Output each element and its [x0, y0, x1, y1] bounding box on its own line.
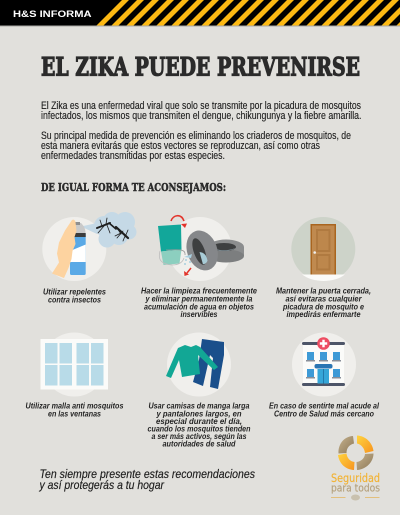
icon: upper arrow — [171, 216, 187, 228]
item: long clothing — [148, 332, 250, 448]
header label: H&S INFORMA — [13, 9, 92, 20]
closing message: Ten siempre presente estas recomendaciones — [40, 468, 255, 481]
intro paragraph 1 — [41, 100, 362, 122]
caption: en las ventanas — [48, 410, 101, 418]
icon: spray can — [70, 222, 86, 275]
caption — [141, 286, 257, 319]
closing message: y así protegerás a tu hogar — [39, 479, 165, 492]
hazard stripes — [96, 0, 400, 26]
caption: inservibles — [180, 310, 218, 319]
icon: trousers — [193, 339, 224, 389]
icon: water drops — [184, 254, 192, 265]
caption: En caso de sentirte mal acude al — [269, 402, 380, 410]
logo: Seguridad para todos: para todos — [331, 482, 380, 494]
intro paragraph 2: enfermedades transmitidas por estas especies. — [41, 150, 225, 162]
icon: standing tyre — [181, 226, 223, 275]
caption: Centro de Salud más cercano — [274, 410, 374, 418]
icon: long-sleeve shirt — [166, 345, 218, 378]
icon: lying tyre — [208, 240, 244, 262]
intro paragraph 2: esta manera evitarás que estos vectores se reproduzcan, así como otras — [41, 140, 320, 152]
icon: hospital — [302, 337, 345, 386]
logo: Seguridad para todos — [331, 436, 380, 500]
caption: Usar camisas de manga larga — [148, 402, 250, 410]
caption: y pantalones largos, en — [156, 410, 242, 418]
caption: especial durante el día, — [156, 417, 242, 426]
caption: contra insectos — [48, 296, 101, 304]
closing message — [39, 468, 255, 492]
logo ring — [338, 436, 374, 470]
item: closed door — [276, 217, 371, 319]
caption: picadura de mosquito e — [282, 302, 364, 312]
logo wordmark: Seguridad — [331, 471, 380, 485]
caption: autoridades de salud — [162, 439, 236, 448]
caption — [26, 402, 124, 418]
intro paragraph 2 — [41, 130, 351, 162]
item: health centre — [269, 332, 380, 418]
icon: door — [310, 224, 336, 274]
caption: cuando los mosquitos tienden — [148, 424, 250, 433]
header bar — [0, 0, 400, 26]
caption: a ser más activos, según las — [152, 432, 247, 441]
item: window mesh — [26, 332, 124, 418]
caption: acumulación de agua en objetos — [144, 302, 254, 312]
caption — [276, 286, 371, 319]
section heading: DE IGUAL FORMA TE ACONSEJAMOS: — [41, 180, 226, 194]
caption: y eliminar permanentemente la — [145, 294, 253, 304]
icon: mosquitoes — [97, 218, 128, 241]
item: cleaning — [141, 216, 257, 319]
caption: Utilizar repelentes — [43, 288, 106, 296]
caption — [148, 402, 250, 448]
caption: así evitaras cualquier — [286, 294, 362, 304]
icon: bucket — [158, 224, 185, 265]
caption: Hacer la limpieza frecuentemente — [141, 286, 257, 296]
caption: impedirás enfermarte — [286, 310, 361, 319]
icon: lower arrow — [184, 268, 191, 276]
caption: Utilizar malla anti mosquitos — [26, 402, 124, 410]
icon: hand — [52, 220, 76, 278]
icon: window — [40, 339, 108, 390]
caption — [43, 288, 106, 304]
caption: Mantener la puerta cerrada, — [276, 286, 371, 296]
item: repellent — [42, 212, 136, 304]
icon: spray cloud — [81, 212, 136, 248]
caption — [269, 402, 380, 418]
